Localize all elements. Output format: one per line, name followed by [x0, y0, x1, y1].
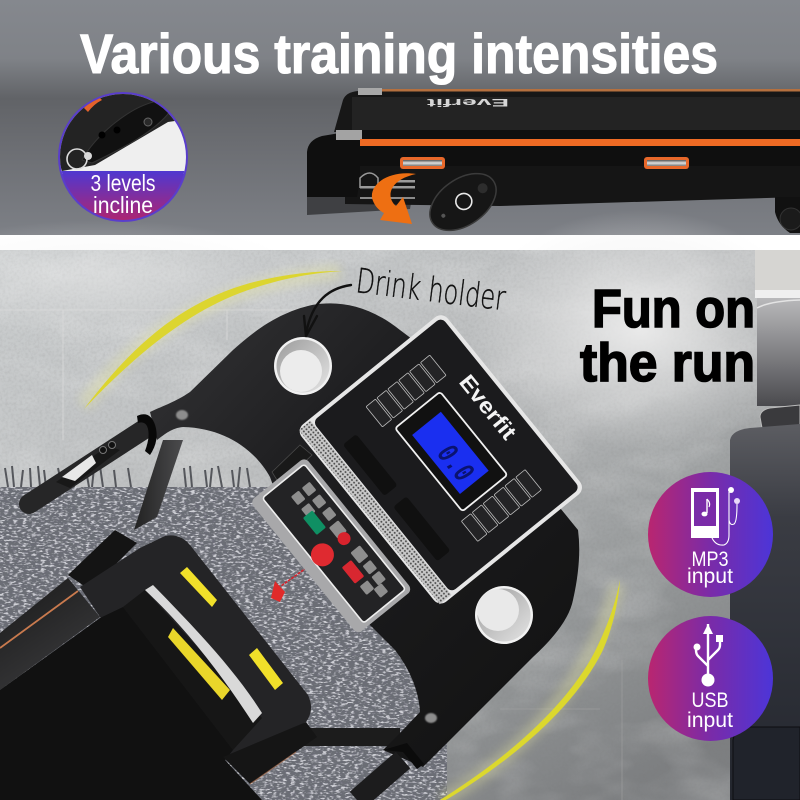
right hand grip [357, 743, 424, 800]
concrete floor [0, 210, 800, 800]
handlebar frame [150, 303, 579, 767]
lcd display [412, 412, 489, 494]
stop button [342, 560, 364, 584]
speaker strip [299, 421, 451, 604]
drink cup upper [274, 337, 332, 395]
treadmill hood and deck [0, 530, 317, 800]
text: everfit deck logo: Everfit [426, 96, 509, 108]
icon: usb symbol [694, 624, 723, 686]
text: the run: the run [580, 333, 755, 393]
upright posts [134, 440, 400, 746]
text: 3 levels: 3 levels [90, 170, 156, 196]
rug [0, 466, 447, 800]
yellow sticker lower [249, 648, 283, 690]
program buttons right [461, 470, 541, 541]
keypad buttons [289, 482, 394, 604]
text: incline: incline [93, 192, 153, 218]
heading: fun on the run [580, 279, 755, 393]
white strip [145, 585, 262, 723]
text: input: input [687, 709, 733, 732]
text: mp3: MP3 [692, 548, 728, 571]
text: usb: USB [692, 689, 728, 712]
inner hood panel [123, 590, 262, 750]
left hand grip [29, 414, 157, 504]
keypad [250, 457, 413, 635]
speed ring button [335, 529, 353, 548]
yellow sticker middle [168, 628, 230, 700]
callout: 3 levels incline [58, 92, 188, 223]
program buttons left [366, 355, 446, 427]
running belt [0, 607, 262, 800]
yellow motion arc: upper [84, 271, 342, 409]
console [296, 312, 586, 607]
treadmill deck side view [307, 88, 800, 233]
heading: various training intensities: Various training intensities [80, 22, 718, 85]
hood body [80, 535, 311, 760]
hood clamp upper [68, 530, 137, 590]
arrow: to drink holder [304, 285, 351, 336]
text: drink holder: Drink holder [354, 261, 508, 319]
panel: fun on the run [0, 210, 800, 800]
text: everfit console logo: Everfit [454, 370, 522, 445]
text: lcd reading: 0.0 [429, 439, 479, 490]
arrow: orange incline arrow [372, 173, 416, 224]
speaker grips [343, 434, 450, 561]
hood clamp lower [223, 722, 317, 784]
start button [303, 510, 326, 535]
yellow motion arc: lower [440, 580, 620, 800]
incline knob [419, 162, 507, 242]
side rail [0, 578, 100, 690]
screen bezel [395, 392, 507, 511]
text: fun on: Fun on [592, 279, 755, 339]
sofa [730, 250, 800, 800]
badge: usb input [648, 616, 773, 741]
yellow sticker top [180, 567, 217, 607]
safety key cord [271, 556, 323, 602]
badge: mp3 input [648, 472, 773, 597]
emergency stop button [306, 539, 339, 571]
text: input: input [687, 565, 733, 588]
annotation: drink holder [304, 261, 508, 336]
drink cup lower [475, 586, 533, 644]
panel: various training intensities [0, 0, 800, 242]
icon: music player and earphones [691, 487, 740, 545]
